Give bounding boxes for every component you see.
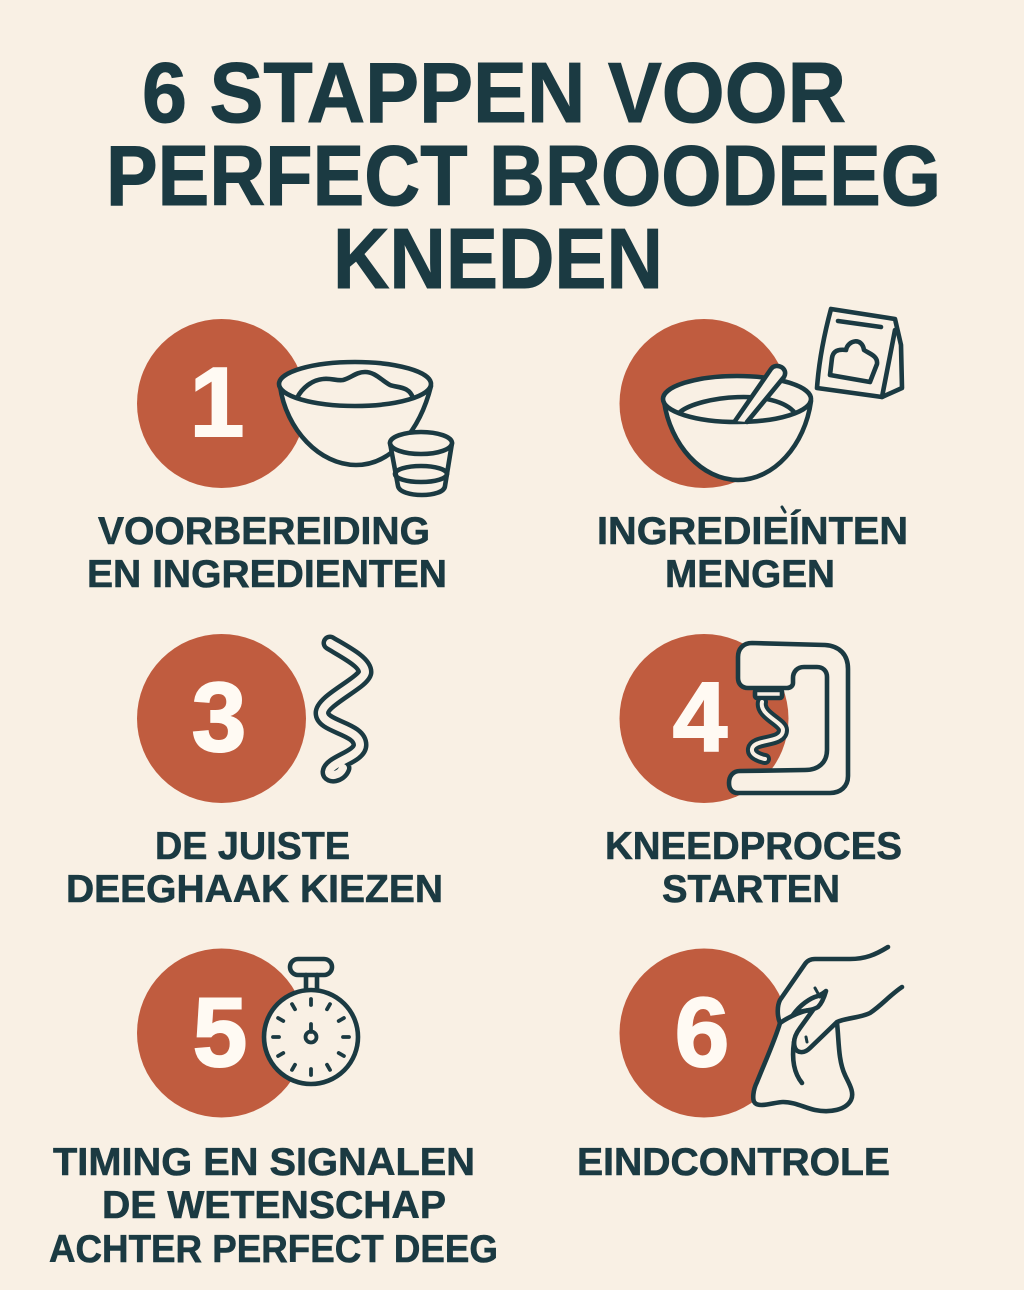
- label: step 5: [49, 1141, 498, 1271]
- label: step 5: TIMING EN SIGNALEN: [53, 1141, 475, 1184]
- number badge 1: 1: [190, 347, 244, 457]
- title: [106, 46, 941, 307]
- label: step 1: VOORBEREIDING: [98, 510, 430, 553]
- number badge 4: 4: [673, 662, 727, 772]
- icon: stopwatch: [264, 959, 358, 1084]
- number badge 5: [137, 948, 306, 1118]
- label: step 3: [66, 825, 443, 911]
- icon: stand mixer: [729, 643, 848, 793]
- icon: bowl with dough and glass: [279, 362, 452, 495]
- panel: step 1: [87, 319, 452, 596]
- panel: step 2: [597, 309, 908, 596]
- icon: mixing bowl with spoon: [663, 366, 811, 480]
- badge without visible number, bowl overlaps it: [620, 319, 788, 488]
- title: PERFECT BROODEEG: [106, 129, 941, 224]
- panel: step 4: [605, 634, 902, 911]
- label: step 4: KNEEDPROCES: [605, 825, 902, 868]
- panel: step 5: [49, 948, 498, 1271]
- icon: flour bag: [817, 309, 902, 397]
- label: step 1: EN INGREDIENTEN: [87, 553, 447, 596]
- label: step 2: [597, 507, 908, 596]
- number badge 5: 5: [193, 977, 247, 1087]
- number badge 3: 3: [192, 662, 246, 772]
- number badge 1: [137, 319, 306, 488]
- label: step 5: ACHTER PERFECT DEEG: [49, 1228, 498, 1271]
- number badge 6: [620, 948, 788, 1118]
- panel: step 6: [577, 947, 902, 1184]
- label: step 6: EINDCONTROLE: [577, 1141, 890, 1184]
- icon: hand testing dough: [753, 947, 902, 1111]
- title: 6 STAPPEN VOOR: [142, 46, 846, 141]
- title: KNEDEN: [333, 212, 663, 307]
- label: step 3: DE JUISTE: [155, 825, 350, 868]
- label: step 2: INGREDIEÍNTEN: [597, 509, 908, 553]
- label: step 4: [605, 825, 902, 911]
- number badge 3: [137, 634, 306, 803]
- number badge 6: 6: [675, 977, 729, 1087]
- label: step 4: STARTEN: [662, 868, 840, 911]
- label: step 2: MENGEN: [665, 553, 835, 596]
- label: step 3: DEEGHAAK KIEZEN: [66, 868, 443, 911]
- panel: step 3: [66, 634, 443, 911]
- number badge 4: [620, 634, 788, 803]
- label: step 1: [87, 510, 447, 596]
- icon: dough hook: [322, 643, 365, 775]
- label: step 5: DE WETENSCHAP: [102, 1184, 446, 1227]
